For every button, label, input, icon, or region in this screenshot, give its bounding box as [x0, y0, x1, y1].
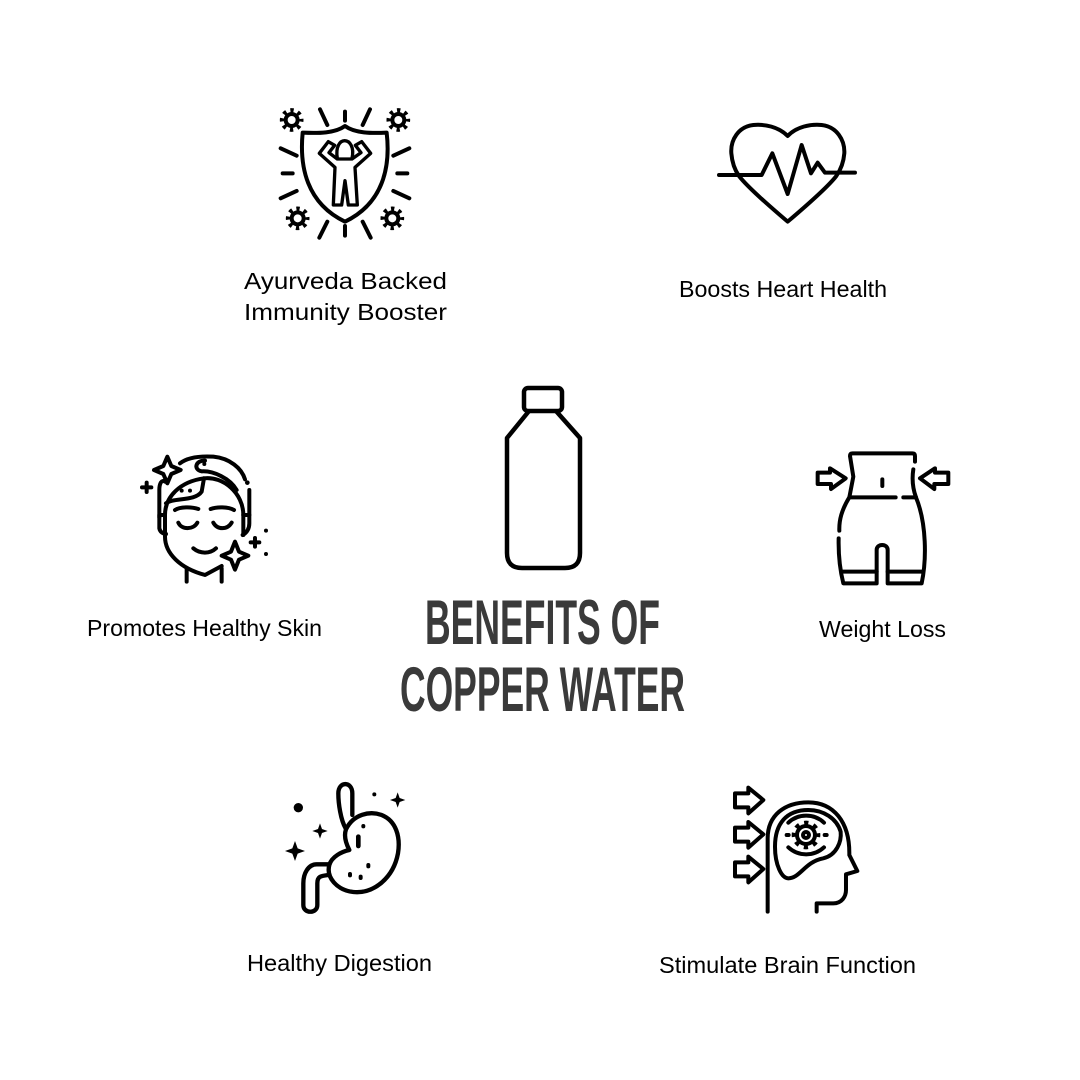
icon: heart with pulse: [719, 125, 855, 222]
panel: centre: [400, 388, 685, 725]
title: BENEFITS OF: [425, 588, 660, 658]
label: heart: Boosts Heart Health: [679, 276, 887, 302]
label: immunity: Ayurveda Backed: [244, 268, 447, 294]
icon: head with gear and arrows: [735, 788, 857, 912]
icon: bottle: [507, 388, 580, 568]
title: COPPER WATER: [400, 655, 685, 725]
label: immunity: Immunity Booster: [244, 299, 447, 325]
panel: brain: [659, 788, 916, 978]
panel: heart: [679, 125, 887, 302]
label: brain: Stimulate Brain Function: [659, 952, 916, 978]
label: immunity: [244, 268, 447, 325]
icon: waist and arrows: [818, 453, 948, 583]
icon: shield with person: [281, 109, 409, 238]
icon: face with sparkles: [142, 456, 268, 582]
label: weight loss: Weight Loss: [819, 616, 946, 642]
title: [400, 588, 685, 725]
panel: immunity: [244, 109, 447, 325]
panel: weight loss: [818, 453, 948, 642]
panel: digestion: [247, 784, 432, 976]
icon: stomach: [285, 784, 405, 912]
label: digestion: Healthy Digestion: [247, 950, 432, 976]
label: skin: Promotes Healthy Skin: [87, 615, 322, 641]
panel: skin: [87, 456, 322, 641]
